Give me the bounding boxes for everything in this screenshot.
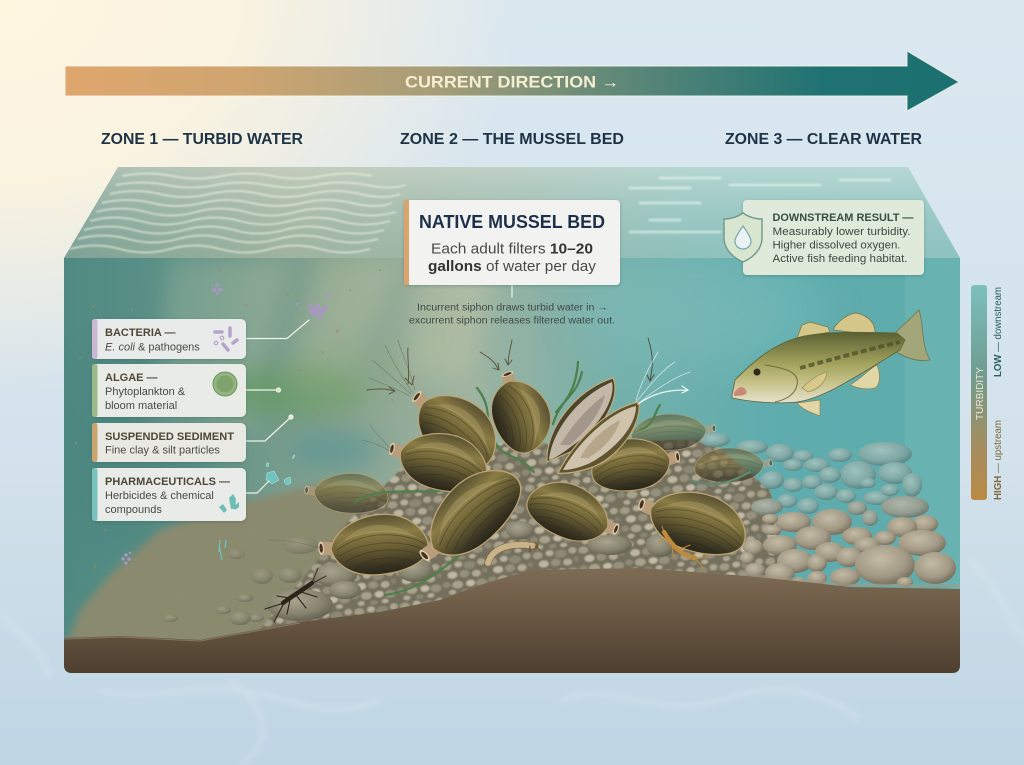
label: suspended sediment: SUSPENDED SEDIMENT: [105, 431, 234, 443]
current direction arrow: [65, 51, 959, 111]
icon: shield with water drop: [724, 213, 762, 262]
connector lines: [246, 285, 512, 493]
siphon caption: [409, 302, 615, 326]
callout: downstream result: DOWNSTREAM RESULT —: [772, 212, 914, 224]
pebbles front: [740, 509, 956, 587]
label: bacteria: BACTERIA —: [105, 327, 175, 339]
icon: algae cell: [213, 372, 237, 396]
open mussel: [547, 378, 639, 473]
callout: native mussel bed: NATIVE MUSSEL BED: [419, 211, 605, 232]
zone headings: ZONE 2 — THE MUSSEL BED: [400, 131, 624, 148]
mussel low far left: [316, 511, 430, 580]
light beams: [150, 258, 500, 430]
label: algae: Phytoplankton &: [105, 386, 186, 398]
faint back mussels: [303, 411, 773, 515]
bacteria cluster: [121, 283, 329, 565]
algae cloud: [215, 368, 365, 416]
callout: downstream result: Higher dissolved oxygen.: [772, 240, 900, 252]
mussel upper centre: [479, 363, 560, 460]
turbidity scale: [971, 285, 1004, 500]
mussel bed: [316, 363, 754, 581]
label: algae: [92, 364, 246, 417]
mud bank: [64, 568, 960, 673]
turbidity scale: TURBIDITY: [974, 367, 986, 420]
sediment mound gravel: [255, 440, 790, 635]
pebbles mid: [751, 496, 929, 526]
callout: native mussel bed: Each adult filters 10–20: [431, 240, 593, 258]
siphon caption: excurrent siphon releases filtered water out.: [409, 316, 615, 326]
label: pharmaceuticals: Herbicides & chemical: [105, 490, 214, 502]
label: bacteria: [92, 319, 246, 359]
pebbles teal back: [700, 433, 922, 514]
mussel upper left: [395, 372, 511, 481]
mussel centre low: [402, 452, 534, 581]
callout: native mussel bed: [404, 200, 620, 285]
chemical crystals: [219, 455, 295, 560]
icon: crystals: [219, 494, 239, 513]
zone headings: ZONE 3 — CLEAR WATER: [725, 131, 922, 148]
mussel centre right: [520, 471, 628, 556]
label: bacteria: E. coli & pathogens: [105, 342, 200, 354]
mussel mid left: [383, 422, 494, 500]
icon: bacteria: [215, 328, 237, 350]
zone headings: ZONE 1 — TURBID WATER: [101, 131, 303, 148]
water surface top plane: [64, 167, 960, 258]
callout: downstream result: Measurably lower turbidity.: [772, 226, 910, 238]
right side wall: [905, 258, 960, 595]
insect: orange nymph: [658, 526, 708, 570]
particles: [75, 269, 393, 618]
callout: downstream result: [724, 200, 924, 275]
label: algae: bloom material: [105, 400, 177, 412]
seaweed: [355, 362, 750, 595]
siphon caption: Incurrent siphon draws turbid water in →: [417, 302, 608, 314]
current direction arrow: CURRENT DIRECTION →: [405, 74, 619, 92]
mussel right: [588, 432, 684, 496]
label: algae: ALGAE —: [105, 372, 158, 384]
label: suspended sediment: [92, 423, 246, 462]
label: pharmaceuticals: [92, 468, 246, 521]
siphon flow lines: [270, 338, 690, 549]
largemouth bass: [732, 310, 930, 416]
turbidity scale: HIGH — upstream: [992, 420, 1004, 500]
pebbles left: [162, 521, 674, 625]
mussel lower right: [630, 477, 754, 565]
insect: stonefly: [265, 568, 326, 622]
label: pharmaceuticals: PHARMACEUTICALS —: [105, 476, 230, 488]
larva: segmented worm: [488, 545, 540, 563]
callout: downstream result: Active fish feeding habitat.: [772, 253, 908, 265]
water tank front: [60, 250, 960, 673]
label: suspended sediment: Fine clay & silt particles: [105, 444, 220, 456]
label: pharmaceuticals: compounds: [105, 504, 162, 516]
far bed haze: [65, 482, 374, 640]
turbidity scale: LOW — downstream: [992, 287, 1004, 377]
zone headings: [101, 131, 922, 148]
callout: native mussel bed: gallons of water per day: [428, 258, 597, 275]
